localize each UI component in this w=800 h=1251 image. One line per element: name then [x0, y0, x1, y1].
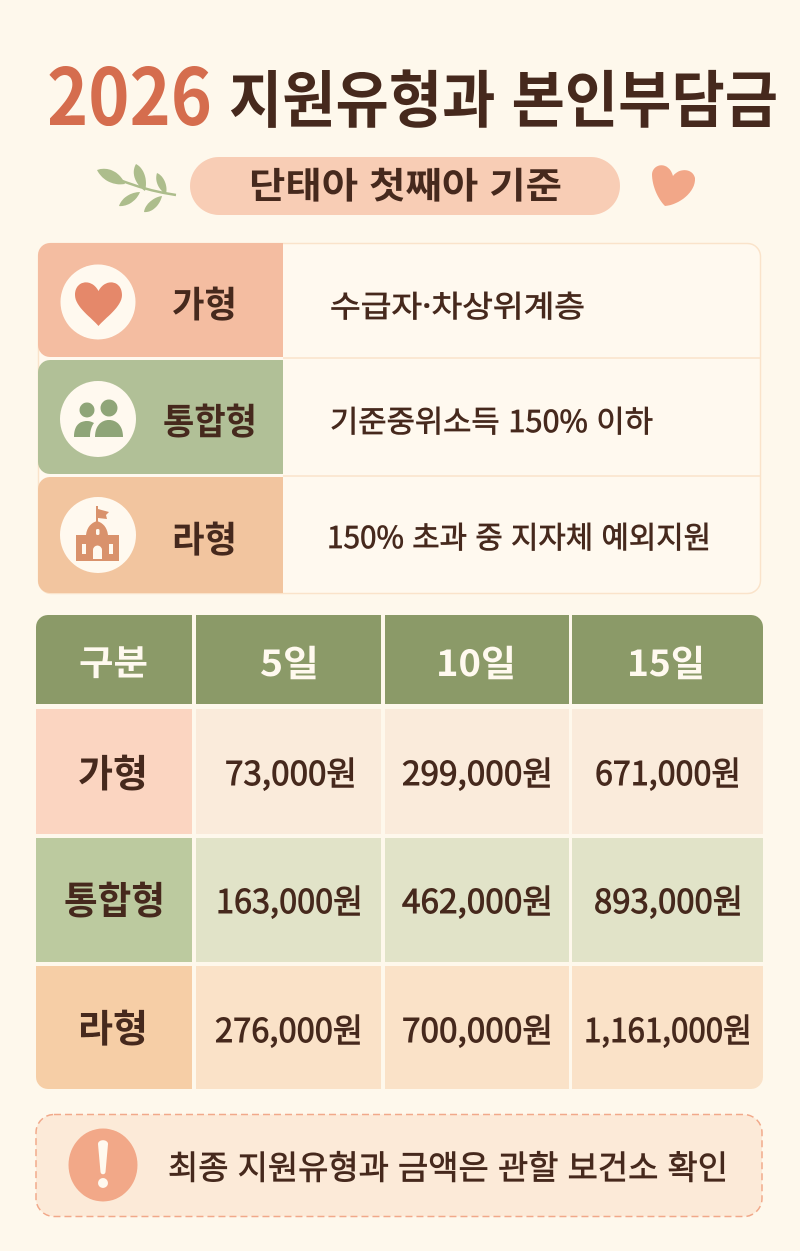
row: 통합형: 통합형	[163, 393, 257, 445]
row: 가형: 수급자·차상위계층	[330, 282, 585, 326]
title	[47, 36, 778, 148]
table row: 라형: 라형	[78, 998, 148, 1053]
table header: 구분	[79, 635, 148, 686]
title: 2026	[47, 36, 212, 148]
table header	[36, 615, 763, 704]
row: 라형: 라형	[172, 511, 237, 563]
callout: notice	[36, 1114, 762, 1216]
subtitle pill: 단태아 첫째아 기준	[249, 157, 562, 209]
callout: notice: 최종 지원유형과 금액은 관할 보건소 확인	[168, 1141, 728, 1189]
table row: 라형	[36, 966, 763, 1089]
row: 통합형: 기준중위소득 150% 이하	[330, 397, 653, 441]
panel: support types	[38, 243, 760, 594]
subtitle pill	[190, 157, 620, 215]
table row: 라형: 700,000원	[402, 1004, 553, 1052]
row: 라형	[38, 477, 711, 593]
row: 가형	[38, 243, 585, 357]
table header: 5일	[260, 635, 319, 687]
table row: 통합형: 163,000원	[216, 875, 363, 923]
table row: 라형: 276,000원	[215, 1004, 363, 1052]
table row: 가형	[36, 709, 763, 834]
row: 가형: 가형	[172, 276, 237, 328]
row: 통합형	[38, 360, 653, 474]
title: 지원유형과 본인부담금	[229, 50, 778, 140]
table row: 통합형: 462,000원	[402, 875, 553, 923]
table row: 가형: 73,000원	[225, 747, 357, 795]
table row: 가형: 가형	[78, 743, 148, 798]
table header: 10일	[436, 635, 516, 687]
row: 라형: 150% 초과 중 지자체 예외지원	[327, 513, 711, 557]
table row: 통합형: 통합형	[64, 870, 165, 925]
table header: 15일	[627, 635, 705, 687]
table row: 통합형: 893,000원	[594, 875, 743, 923]
icon: heart	[652, 165, 695, 206]
table row: 가형: 299,000원	[402, 747, 553, 795]
icon: leaf branch	[97, 164, 176, 212]
table: cost by type and days	[36, 615, 763, 1089]
table row: 통합형	[36, 838, 763, 962]
icon: exclamation	[68, 1128, 138, 1202]
table row: 가형: 671,000원	[595, 747, 741, 795]
table row: 라형: 1,161,000원	[584, 1004, 752, 1052]
